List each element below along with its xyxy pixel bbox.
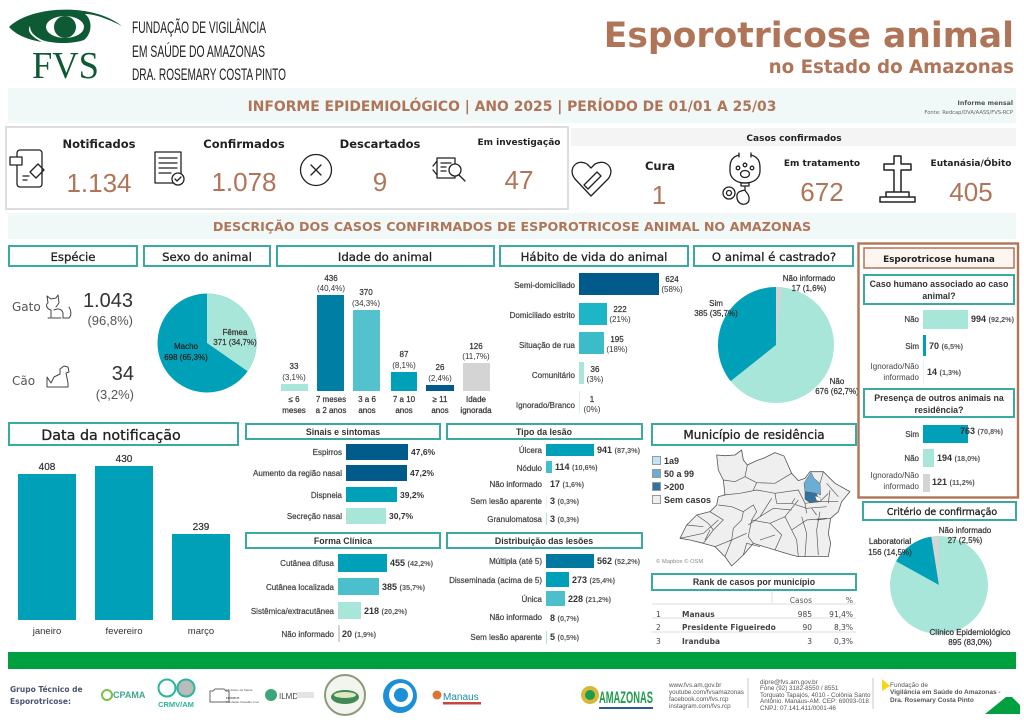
pie chart: castrado: Não informado (783, 274, 836, 283)
KPI: Notificados: 1.134 (66, 168, 132, 198)
panel: hábito de vida (500, 246, 688, 414)
panel: o animal é castrado: O animal é castrado? (712, 250, 836, 264)
panel: sinais e sintomas: 47,6% (411, 447, 436, 457)
bar chart: idade: (40,4%) (317, 284, 345, 293)
KPI: Confirmados: Confirmados (203, 137, 285, 151)
panel: distribuição das lesões (447, 533, 642, 644)
panel: rank de casos por município (652, 574, 856, 646)
table: rank: Iranduba (682, 637, 720, 646)
panel: tipo da lesão: Úlcera (519, 446, 543, 455)
KPI: Descartados: 9 (373, 167, 387, 197)
map legend: Sem casos (664, 495, 711, 505)
icon: dog (47, 366, 69, 387)
footer: technical group: Grupo Técnico de (10, 685, 83, 694)
logo: FVS (9, 10, 122, 87)
table: rank: 3 (807, 637, 812, 646)
panel: forma clínica: 20 (1,9%) (342, 629, 377, 639)
KPI: Cura: 1 (652, 180, 666, 210)
bar chart: data da notificação: fevereiro (106, 626, 142, 637)
logo: CRMV/AM: CRMV/AM (158, 700, 194, 709)
table: rank: Manaus (682, 610, 715, 619)
report period band: INFORME EPIDEMIOLÓGICO | ANO 2025 | PERÍODO DE 01/01 A 25/03 (248, 97, 776, 115)
panel: forma clínica: Cutânea difusa (280, 559, 335, 568)
pie chart: sexo: Macho (174, 342, 199, 351)
table: rank: 0,3% (834, 637, 853, 646)
panel: data da notificação (9, 423, 238, 637)
panel: forma clínica (246, 533, 440, 642)
logo: blue seal (383, 679, 417, 713)
footer: technical group: Esporotricose: (10, 697, 71, 706)
organisation name: FUNDAÇÃO DE VIGILÂNCIA (132, 18, 266, 37)
footer: contact details: Antônio. Manaus-AM. CEP: 69093-018 (760, 698, 869, 705)
bar chart: hábito: 36 (591, 365, 600, 374)
bar chart: hábito: Semi-domiciliado (514, 281, 576, 290)
footer: technical group (10, 685, 83, 706)
table: rank: 2 (656, 623, 661, 632)
panel: sinais e sintomas: Sinais e sintomas (306, 427, 380, 437)
bar chart: idade: 126 (469, 342, 483, 351)
pie chart: castrado: 385 (35,7%) (694, 309, 738, 318)
pie chart: critério: 895 (83,0%) (948, 638, 992, 647)
bar chart: data da notificação: 430 (116, 454, 133, 465)
map legend: >200 (664, 482, 684, 492)
panel: espécie: Espécie (51, 250, 95, 264)
table: rank: % (846, 596, 853, 605)
panel: distribuição das lesões: Não informado (490, 613, 543, 622)
pie chart: castrado: Sim (709, 299, 723, 308)
panel: distribuição das lesões: Disseminada (acima de 5) (449, 576, 542, 585)
logo: CPAMA: CPAMA (113, 690, 146, 700)
icon: discarded cross (300, 154, 332, 186)
table: rank (652, 592, 856, 646)
footer: contact details: Fone (92) 3182-8550 / 8551 (760, 685, 839, 692)
table: rank: Presidente Figueiredo (682, 623, 776, 632)
panel: tipo da lesão (447, 424, 642, 525)
pie chart: castrado (694, 274, 859, 403)
panel: município de residência: Município de residência (683, 428, 825, 442)
map legend (652, 456, 711, 505)
table: rank: 91,4% (829, 610, 853, 619)
bar chart: idade: ignorada (460, 406, 492, 415)
logo: Fundação Oswaldo Cruz (210, 688, 260, 704)
bar chart: idade: a 2 anos (316, 406, 346, 415)
title: no Estado do Amazonas (769, 57, 1014, 78)
panel: sinais e sintomas: 30,7% (389, 511, 414, 521)
bar chart: hábito: (0%) (584, 405, 601, 414)
KPI: Confirmados: 1.078 (211, 167, 277, 197)
bar chart: data da notificação: janeiro (32, 626, 61, 637)
panel: tipo da lesão: Nódulo (517, 464, 543, 473)
table: rank: 1 (656, 610, 661, 619)
organisation name: DRA. ROSEMARY COSTA PINTO (132, 65, 286, 84)
panel: esporotricose humana (858, 244, 1018, 498)
panel: forma clínica: Sistêmica/extracutânea (251, 607, 335, 616)
KPI: Cura (645, 159, 675, 210)
heading: esporotricose humana (864, 248, 1014, 268)
bar chart: hábito: Domiciliado estrito (510, 311, 576, 320)
sub-panel: presença de outros animais: Sim (905, 430, 919, 439)
footer: web links: www.fvs.am.gov.br (668, 682, 721, 689)
bar chart: idade: (2,4%) (428, 374, 452, 383)
bar chart: data da notificação: 408 (39, 462, 56, 473)
panel: sinais e sintomas: Aumento da região nasal (253, 469, 342, 478)
panel: forma clínica: Cutânea localizada (266, 583, 335, 592)
panel: distribuição das lesões: Múltipla (até 5) (489, 557, 542, 566)
report period band (8, 88, 1016, 123)
panel: espécie: 34 (112, 363, 134, 385)
panel: espécie: Cão (12, 374, 35, 388)
bar chart: hábito: 1 (590, 395, 595, 404)
sub-panel: caso humano associado: 14 (1,3%) (927, 367, 962, 377)
panel: confirmed case outcomes: Casos confirmados (746, 134, 842, 144)
bar chart: idade: 26 (436, 363, 445, 372)
KPI: Eutanásia/Óbito (931, 157, 1011, 207)
panel: confirmed case outcomes (571, 128, 1016, 210)
bar chart: data da notificação: 239 (193, 522, 210, 533)
KPI: Notificados (62, 137, 136, 198)
sub-panel: presença de outros animais: 121 (11,2%) (932, 477, 975, 487)
KPI: Em tratamento: 672 (800, 177, 844, 207)
report period band: Fonte: Redcap/DVA/AASS/FVS-RCP (924, 110, 1013, 116)
footer: web links: instagram.com/fvs.rcp (669, 703, 731, 710)
footer: web links: facebook.com/fvs.rcp (669, 696, 729, 703)
logo: Amazonas government: AMAZONAS (599, 688, 653, 707)
bar chart: hábito: Ignorado/Branco (516, 401, 576, 410)
bar chart: data da notificação: março (188, 626, 214, 637)
footer: foundation signature: Vigilância em Saúde do Amazonas - (890, 689, 1001, 696)
KPI: Notificados: Notificados (62, 137, 136, 151)
pie chart: critério (868, 526, 1011, 647)
bar chart: idade: 3 a 6 (358, 395, 376, 404)
KPI: Em tratamento: Em tratamento (784, 159, 860, 169)
panel: sinais e sintomas: 47,2% (410, 468, 435, 478)
sub-panel: presença de outros animais: Presença de outros animais na (874, 393, 1004, 403)
pie chart: critério: 27 (2,5%) (948, 536, 983, 545)
logo: Fundação Oswaldo Cruz: Fundação Oswaldo Cruz (226, 700, 260, 704)
icon: heart with bandage (572, 162, 611, 196)
bar chart: idade: (34,3%) (352, 299, 380, 308)
KPI: Em investigação: 47 (505, 165, 533, 195)
icon: grave cross (880, 156, 915, 202)
panel: data da notificação: Data da notificação (41, 428, 181, 444)
bar chart: idade (281, 274, 492, 415)
panel: sexo do animal (144, 246, 270, 392)
panel: forma clínica: Não informado (282, 630, 335, 639)
pie chart: critério: 156 (14,5%) (868, 548, 912, 557)
panel: distribuição das lesões: Distribuição das lesões (495, 536, 593, 546)
panel: forma clínica: 455 (42,2%) (390, 558, 434, 568)
sub-panel: presença de outros animais: 194 (18,0%) (937, 453, 981, 463)
pie chart: sexo: Fêmea (223, 328, 248, 337)
panel: notification totals (6, 127, 568, 209)
table: rank: 985 (798, 610, 812, 619)
pie chart: castrado: Não (830, 377, 845, 386)
sub-panel: caso humano associado: Ignorado/Não (871, 362, 920, 371)
panel: critério de confirmação (863, 502, 1016, 647)
title (604, 16, 1014, 78)
panel: forma clínica: Forma Clínica (314, 536, 372, 546)
logo: Amazonas government (581, 686, 653, 709)
bar chart: idade: ≤ 6 (288, 395, 300, 404)
panel: espécie: 1.043 (83, 290, 133, 312)
bar chart: hábito: 195 (610, 335, 624, 344)
panel: sexo do animal: Sexo do animal (162, 250, 252, 264)
icon: stethoscope with paw (723, 153, 760, 204)
panel: forma clínica: 385 (35,7%) (382, 582, 426, 592)
bar chart: hábito: 624 (665, 275, 679, 284)
panel: distribuição das lesões: 273 (25,4%) (572, 575, 616, 585)
bar chart: idade: Idade (466, 395, 487, 404)
footer: partner logos (102, 675, 653, 715)
title: Esporotricose animal (604, 16, 1014, 56)
logo: circular seal (325, 675, 365, 715)
footer: web links: youtube.com/fvsamazonas (669, 689, 744, 696)
sub-panel: caso humano associado: Não (904, 315, 920, 324)
icon: phone with bell (10, 150, 44, 187)
icon: cat (47, 295, 71, 318)
bar chart: hábito (510, 273, 683, 414)
pie chart: critério: Não informado (939, 526, 992, 535)
panel: espécie: Gato (12, 300, 41, 314)
pie chart: sexo (158, 294, 257, 392)
panel: distribuição das lesões: 5 (0,5%) (550, 632, 580, 642)
panel: hábito de vida: Hábito de vida do animal (521, 250, 667, 264)
KPI: Em investigação: Em investigação (478, 138, 560, 148)
panel: idade do animal: Idade do animal (338, 250, 432, 264)
organisation name (132, 18, 286, 84)
sub-panel: presença de outros animais: residência? (915, 405, 963, 415)
KPI: Cura: Cura (645, 159, 675, 173)
KPI: Em investigação (478, 138, 560, 195)
green footer bar (8, 652, 1016, 669)
panel: critério de confirmação: Critério de confirmação (887, 507, 997, 518)
footer: contact details: CNPJ: 07.141.411/0001-46 (760, 705, 836, 712)
footer: contact details: dipre@fvs.am.gov.br (760, 679, 818, 686)
panel: tipo da lesão: Não informado (490, 480, 543, 489)
heading: esporotricose humana: Esporotricose humana (883, 255, 995, 265)
pie chart: castrado: 17 (1,6%) (792, 284, 827, 293)
bar chart: idade: 7 a 10 (393, 395, 416, 404)
logo: Fundação Oswaldo Cruz: FIOCRUZ (226, 696, 239, 700)
logo: ILMD: ILMD (279, 692, 298, 701)
sub-panel: caso humano associado: Caso humano associado ao caso (870, 279, 1009, 289)
table: rank: 3 (656, 637, 661, 646)
logo: Manaus (432, 690, 481, 704)
panel: sinais e sintomas: 39,2% (400, 490, 425, 500)
sub-panel: presença de outros animais: Não (904, 454, 920, 463)
bar chart: idade: anos (358, 406, 376, 415)
panel: distribuição das lesões: 228 (21,2%) (568, 594, 612, 604)
icon: confirmed document (155, 152, 184, 185)
bar chart: hábito: Comunitário (532, 371, 576, 380)
pie chart: critério: Laboratorial (869, 537, 911, 546)
bar chart: idade: anos (395, 406, 413, 415)
panel: tipo da lesão: 17 (1,6%) (550, 479, 585, 489)
pie chart: critério: Clínico Epidemiológico (930, 628, 1011, 637)
map attribution: © Mapbox © OSM (656, 558, 703, 565)
bar chart: hábito: 222 (613, 305, 627, 314)
panel: distribuição das lesões: Sem lesão aparente (470, 633, 543, 642)
footer: foundation signature: Dra. Rosemary Costa Pinto (890, 697, 974, 704)
logo: ILMD (265, 689, 314, 701)
bar chart: idade: 33 (290, 362, 299, 371)
bar chart: hábito: (58%) (661, 285, 683, 294)
footer: web links (668, 682, 744, 710)
pie chart: castrado: 676 (62,7%) (815, 387, 859, 396)
section band: DESCRIÇÃO DOS CASOS CONFIRMADOS DE ESPOROTRICOSE ANIMAL NO AMAZONAS (213, 219, 811, 234)
bar chart: hábito: (18%) (606, 345, 628, 354)
sub-panel: caso humano associado: 70 (6,5%) (929, 341, 964, 351)
bar chart: idade: meses (282, 406, 306, 415)
panel: idade do animal (277, 246, 494, 415)
panel: espécie: (96,8%) (87, 313, 133, 328)
sub-panel: caso humano associado: Sim (905, 342, 919, 351)
sub-panel: caso humano associado: informado (883, 373, 920, 382)
bar chart: data da notificação (18, 454, 230, 637)
panel: tipo da lesão: 114 (10,6%) (555, 462, 598, 472)
map legend: 50 a 99 (664, 469, 694, 479)
organisation name: EM SAÚDE DO AMAZONAS (132, 42, 265, 61)
sub-panel: caso humano associado: 994 (92,2%) (971, 314, 1015, 324)
sub-panel: presença de outros animais: Ignorado/Não (871, 471, 920, 480)
report period band: Informe mensal (958, 100, 1013, 107)
KPI: Descartados: Descartados (340, 137, 420, 151)
panel: sinais e sintomas (246, 424, 440, 524)
bar chart: idade: 7 meses (316, 395, 346, 404)
sub-panel: caso humano associado (864, 275, 1015, 385)
logo: FVS: FVS (32, 45, 99, 87)
bar chart: idade: 436 (324, 274, 338, 283)
pie chart: sexo: 371 (34,7%) (213, 338, 257, 347)
panel: distribuição das lesões: Única (522, 595, 543, 604)
logo: CRMV/AM (158, 680, 194, 709)
bar chart: idade: ≥ 11 (433, 395, 448, 404)
bar chart: hábito: Situação de rua (519, 341, 576, 350)
panel: tipo da lesão: Sem lesão aparente (470, 497, 543, 506)
footer: contact details (748, 678, 873, 712)
table: rank: 8,3% (834, 623, 853, 632)
panel: sinais e sintomas: Espirros (313, 448, 342, 457)
panel: tipo da lesão: Tipo da lesão (516, 427, 573, 437)
table: rank: 90 (802, 623, 812, 632)
panel: tipo da lesão: 3 (0,3%) (550, 496, 580, 506)
panel: espécie: (3,2%) (96, 387, 134, 402)
sub-panel: caso humano associado: animal? (922, 291, 956, 301)
panel: sinais e sintomas: Secreção nasal (287, 512, 342, 521)
table: rank: Casos (790, 596, 812, 605)
sub-panel: presença de outros animais (864, 389, 1014, 492)
bar chart: hábito: (3%) (587, 375, 604, 384)
panel: município de residência (652, 424, 856, 566)
panel: forma clínica: 218 (20,2%) (364, 606, 408, 616)
footer: foundation signature: Fundação de (890, 682, 928, 689)
panel: rank de casos por município: Rank de casos por município (693, 577, 816, 587)
bar chart: idade: 370 (359, 288, 373, 297)
KPI: Em tratamento (784, 159, 860, 207)
panel: distribuição das lesões: 8 (0,7%) (550, 613, 580, 623)
bar chart: idade: 87 (400, 350, 409, 359)
bar chart: idade: (3,1%) (282, 373, 306, 382)
bar chart: idade: anos (431, 406, 449, 415)
bar chart: idade: (8,1%) (392, 361, 416, 370)
KPI: Eutanásia/Óbito: 405 (949, 177, 993, 207)
bar chart: idade: (11,7%) (462, 352, 490, 361)
map legend: 1a9 (664, 456, 679, 466)
bar chart: hábito: (21%) (609, 315, 631, 324)
panel: o animal é castrado (694, 246, 859, 403)
footer: foundation signature (882, 679, 1020, 714)
pie chart: sexo: 698 (65,3%) (164, 353, 208, 362)
panel: sinais e sintomas: Dispneia (311, 491, 343, 500)
map: Amazonas municipalities (680, 450, 850, 566)
footer: contact details: Torquato Tapajós, 4010 - Colônia Santo (760, 692, 871, 699)
panel: distribuição das lesões: 562 (52,2%) (597, 556, 641, 566)
section band (8, 213, 1016, 239)
panel: tipo da lesão: 3 (0,3%) (550, 514, 580, 524)
icon: clipboard with magnifier (433, 158, 465, 181)
KPI: Descartados (340, 137, 420, 197)
panel: tipo da lesão: 941 (87,3%) (597, 445, 641, 455)
sub-panel: presença de outros animais: informado (883, 482, 920, 491)
sub-panel: presença de outros animais: 763 (70,8%) (960, 426, 1004, 436)
KPI: Confirmados (203, 137, 285, 197)
panel: tipo da lesão: Granulomatosa (487, 515, 543, 524)
logo: Fundação Oswaldo Cruz: Ministério da Saúde (226, 688, 253, 692)
panel: espécie (9, 246, 137, 402)
KPI: Eutanásia/Óbito: Eutanásia/Óbito (931, 157, 1011, 169)
logo: Manaus: Manaus (443, 692, 479, 703)
